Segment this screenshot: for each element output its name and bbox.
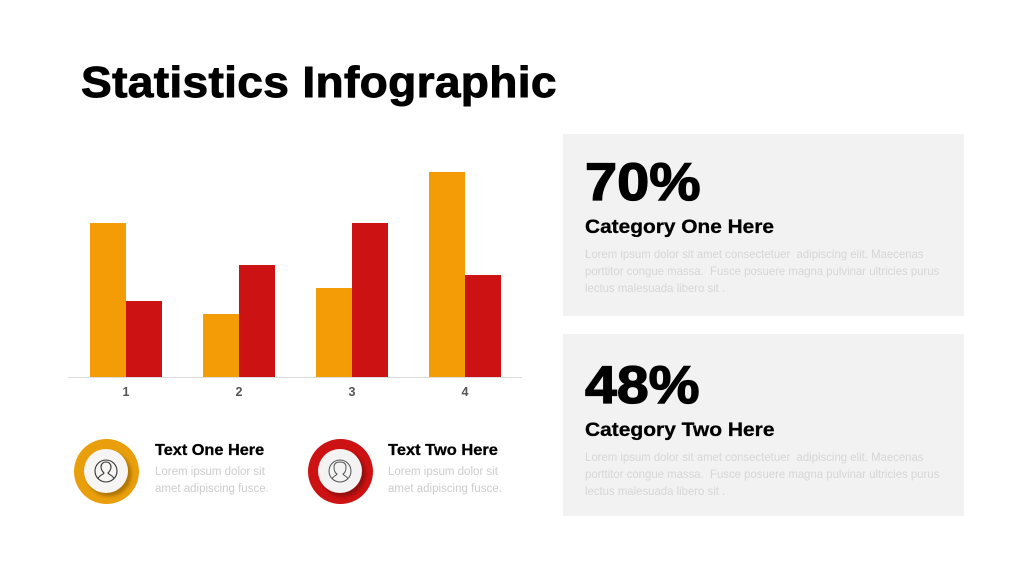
- legend item two: [308, 439, 502, 504]
- icon: red ring with person: [308, 439, 373, 504]
- legend text two: Lorem ipsum dolor sit: [388, 466, 498, 478]
- legend text two: [388, 466, 502, 495]
- group 4 bars: [429, 172, 501, 377]
- body text two: porttitor congue massa. Fusce posuere magna pulvinar ultricies purus: [585, 468, 939, 480]
- legend heading two: Text Two Here: [388, 442, 498, 458]
- heading: category two: Category Two Here: [585, 419, 774, 441]
- axis label 3: 3: [349, 385, 355, 399]
- body text one: [585, 248, 939, 294]
- group 1 bars: [90, 223, 162, 377]
- axis label 4: 4: [462, 385, 468, 399]
- heading: category one: Category One Here: [585, 216, 774, 238]
- body text two: [585, 450, 939, 498]
- body text one: porttitor congue massa. Fusce posuere magna pulvinar ultricies purus: [585, 264, 939, 278]
- axis label 2: 2: [236, 385, 242, 399]
- body text two: Lorem ipsum dolor sit amet consectetuer adipiscing elit. Maecenas: [585, 450, 923, 464]
- group 2 bars: [203, 265, 275, 377]
- body text one: lectus malesuada libero sit .: [585, 282, 725, 294]
- legend text one: [155, 466, 269, 495]
- stat 70%: 70%: [585, 153, 701, 212]
- legend item one: [74, 439, 269, 504]
- legend text one: Lorem ipsum dolor sit: [155, 466, 265, 478]
- axis label 1: 1: [123, 385, 129, 399]
- panel: category two: [563, 334, 964, 516]
- bar chart: [68, 172, 522, 378]
- body text two: lectus malesuada libero sit .: [585, 484, 725, 498]
- stat 48%: 48%: [585, 356, 700, 415]
- title: Statistics Infographic: [81, 59, 557, 107]
- icon: orange ring with person: [74, 439, 139, 504]
- legend heading one: Text One Here: [155, 442, 264, 458]
- group 3 bars: [316, 223, 388, 377]
- panel: category one: [563, 134, 964, 316]
- legend text two: amet adipiscing fusce.: [388, 483, 502, 495]
- body text one: Lorem ipsum dolor sit amet consectetuer adipiscing elit. Maecenas: [585, 248, 923, 260]
- legend text one: amet adipiscing fusce.: [155, 483, 269, 495]
